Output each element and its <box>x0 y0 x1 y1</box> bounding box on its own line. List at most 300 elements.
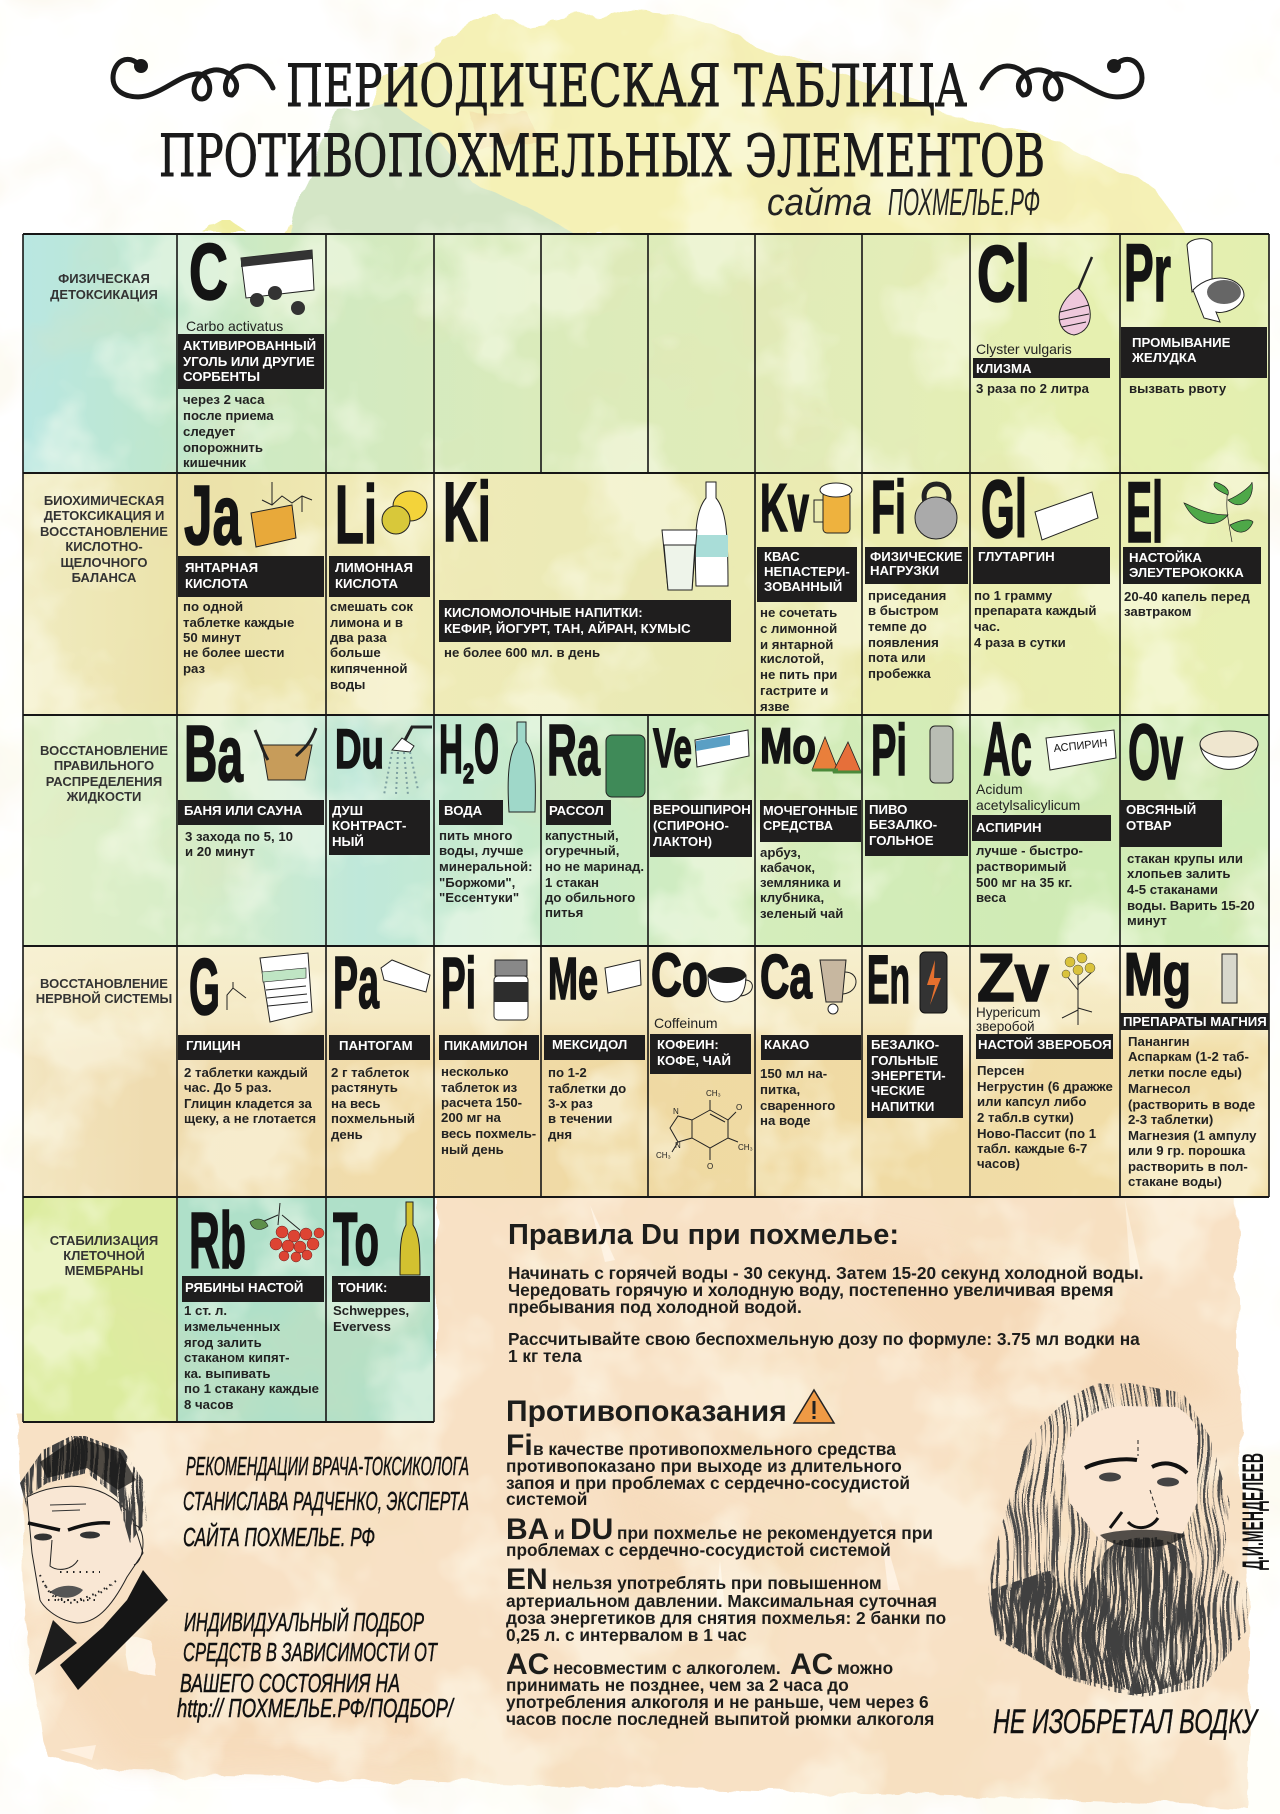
symbol Du: Du <box>335 717 384 780</box>
dosage: с лимонной <box>760 621 837 636</box>
name: КИСЛОТА <box>335 576 398 591</box>
cell: To tonic <box>332 1197 430 1334</box>
icon: box <box>605 960 641 993</box>
dosage: растворимый <box>976 859 1066 874</box>
icon: mug <box>814 483 852 533</box>
dosage: Ново-Пассит (по 1 <box>977 1126 1096 1141</box>
symbol Ja: Ja <box>184 468 242 562</box>
dosage: приседания <box>868 588 946 603</box>
name: ЗОВАННЫЙ <box>764 579 842 594</box>
dosage: Персен <box>977 1063 1025 1078</box>
icon: cocoa glass <box>820 960 856 1014</box>
cell: Gl glutargin <box>973 464 1110 650</box>
name bar <box>1121 327 1267 378</box>
dosage: на весь <box>331 1096 380 1111</box>
icon: kettlebell <box>915 484 957 539</box>
dosage: кислотой, <box>760 651 824 666</box>
text block: Fi warning: в качестве противопохмельного средства <box>533 1439 896 1459</box>
molecule: caffeine <box>656 1089 753 1171</box>
name bar <box>865 800 968 856</box>
text block: individual selection: http:// ПОХМЕЛЬЕ.РФ/ПОДБОР/ <box>177 1693 455 1723</box>
cell: H2O water <box>439 710 535 905</box>
dosage: 20-40 капель перед <box>1124 589 1250 604</box>
dosage: пота или <box>868 650 926 665</box>
icon: jar <box>494 960 528 1020</box>
name: ГОЛЬНЫЕ <box>871 1053 938 1068</box>
molecule: caffeine: O <box>707 1162 713 1171</box>
row label: nervous system: ВОССТАНОВЛЕНИЕ <box>40 976 168 991</box>
dosage: гастрите и <box>760 683 828 698</box>
dosage: Глицин кладется за <box>184 1096 313 1111</box>
dosage: минеральной: <box>439 859 533 874</box>
name: КЕФИР, ЙОГУРТ, ТАН, АЙРАН, КУМЫС <box>444 621 691 636</box>
text block: rules: Начинать с горячей воды - 30 секунд. Затем 15-20 секунд холодной воды. <box>508 1263 1144 1283</box>
icon: box <box>381 960 430 992</box>
icon: tonic bottle <box>400 1202 420 1275</box>
name: ЛИМОННАЯ <box>335 560 413 575</box>
text block: En warning: нельзя употреблять при повышенном <box>552 1573 882 1593</box>
dosage: язве <box>760 699 790 714</box>
icon: box <box>1035 492 1098 540</box>
dosage: Панангин <box>1128 1034 1190 1049</box>
cell: En energy drinks <box>867 941 963 1118</box>
dosage: не более шести <box>183 645 284 660</box>
name: ГОЛЬНОЕ <box>869 833 934 848</box>
text block: Fi warning: запоя и при проблемах с сердечно-сосудистой <box>506 1473 910 1493</box>
dosage: 3 захода по 5, 10 <box>185 829 293 844</box>
name: ТОНИК: <box>338 1280 387 1295</box>
name: НАПИТКИ <box>871 1099 934 1114</box>
name bar <box>976 1034 1113 1059</box>
molecule: caffeine: N <box>675 1141 681 1150</box>
symbol Ba: Ba <box>184 709 243 798</box>
symbol H2O: 2 <box>463 758 474 789</box>
dosage: (растворить в воде <box>1128 1097 1255 1112</box>
cell: Ov oat broth <box>1120 707 1258 928</box>
text block: Ba and Du warning: и <box>554 1523 565 1543</box>
text block: rules: Чередовать горячую и холодную воду, постепенно увеличивая время <box>508 1280 1114 1300</box>
name bar <box>1120 800 1222 847</box>
row label: fluid redistribution: ПРАВИЛЬНОГО <box>54 758 154 773</box>
cell: Me mexidol <box>544 946 645 1142</box>
text block: En warning: доза энергетиков для снятия похмелья: 2 банки по <box>506 1608 946 1628</box>
name bar <box>178 334 324 389</box>
icon: plant <box>1184 482 1253 542</box>
symbol Pi: Pi <box>871 711 907 791</box>
text block: Ba and Du warning: DU <box>570 1513 613 1546</box>
name bar <box>761 1035 861 1060</box>
icon: aspirin box <box>1046 730 1116 770</box>
dosage: смешать сок <box>330 599 413 614</box>
name: КИСЛОТА <box>185 576 248 591</box>
dosage: огуречный, <box>545 843 619 858</box>
name: ОТВАР <box>1126 818 1172 833</box>
name: ПРЕПАРАТЫ МАГНИЯ <box>1123 1014 1267 1029</box>
name: АКТИВИРОВАННЫЙ <box>183 338 316 353</box>
symbol Pi: Pi <box>441 944 476 1024</box>
name: ЧЕСКИЕ <box>871 1083 925 1098</box>
text block: doctor recommendation: САЙТА ПОХМЕЛЬЕ. РФ <box>183 1522 375 1552</box>
symbol Ac: Ac <box>983 707 1032 792</box>
cell: Ra brine <box>545 711 645 920</box>
heading: Du rules: Правила Du при похмелье: <box>508 1219 899 1251</box>
cell: H2O water: O <box>474 710 499 788</box>
symbol Mo: Mo <box>760 718 816 774</box>
dosage: таблеток из <box>441 1080 518 1095</box>
dosage: кабачок, <box>760 860 815 875</box>
name: ВОДА <box>444 803 483 818</box>
dosage: таблетке каждые <box>183 615 294 630</box>
dosage: 2 табл.в сутки) <box>977 1110 1074 1125</box>
name bar <box>329 1035 430 1060</box>
dosage: не более 600 мл. в день <box>444 645 600 660</box>
text block: En warning: EN <box>506 1563 548 1596</box>
dosage: 2 г таблеток <box>331 1065 409 1080</box>
text block: Ac warning: часов после последней выпитой рюмки алкоголя <box>506 1709 934 1729</box>
dosage: ный день <box>441 1142 504 1157</box>
dosage: расчета 150- <box>441 1095 522 1110</box>
title <box>159 52 1045 190</box>
dosage: 3 раза по 2 литра <box>976 381 1090 396</box>
cell: Fi exercise <box>865 465 968 681</box>
dosage: клубника, <box>760 890 824 905</box>
text block: Ac warning: употребления алкоголя и не раньше, чем через 6 <box>506 1692 929 1712</box>
row label: fluid redistribution: ЖИДКОСТИ <box>66 789 141 804</box>
cell: Du shower <box>329 717 432 855</box>
icon: bowl <box>1200 731 1258 769</box>
symbol To: To <box>333 1197 379 1281</box>
dosage: щеку, а не глотается <box>184 1111 316 1126</box>
text block: individual selection <box>177 1607 455 1723</box>
dosage: Негрустин (6 дражже <box>977 1079 1113 1094</box>
dosage: табл. каждые 6-7 <box>977 1141 1087 1156</box>
icon: wooden bucket <box>255 728 316 780</box>
text block: Ba and Du warning: при похмелье не рекомендуется при <box>617 1523 933 1543</box>
dosage: лимона и в <box>330 615 403 630</box>
symbol Cl: Cl <box>977 229 1030 318</box>
dosage: сваренного <box>760 1098 835 1113</box>
symbol Ki: Ki <box>443 465 491 559</box>
dosage: два раза <box>330 630 387 645</box>
name: МОЧЕГОННЫЕ <box>763 803 858 818</box>
name: КОФЕИН: <box>657 1037 719 1052</box>
name: НАГРУЗКИ <box>870 563 939 578</box>
symbol Ca: Ca <box>760 943 812 1012</box>
cell: Rb rowan <box>182 1196 324 1412</box>
subtitle <box>767 182 1040 224</box>
symbol C: C <box>189 227 228 316</box>
subtitle: сайта <box>767 182 872 224</box>
dosage: но не маринад. <box>545 859 644 874</box>
icon: glycine package <box>227 953 312 1022</box>
dosage: питка, <box>760 1082 800 1097</box>
dosage: вызвать рвоту <box>1129 381 1227 396</box>
latin name: Carbo activatus <box>186 318 283 334</box>
dosage: 1 стакан <box>545 875 599 890</box>
dosage: препарата каждый <box>974 603 1097 618</box>
icon: bottle and glass <box>662 482 728 590</box>
dosage: "Ессентуки" <box>439 890 519 905</box>
dosage: таблетки до <box>548 1081 626 1096</box>
dosage: пробежка <box>868 666 931 681</box>
cell: Mg magnesium <box>1120 941 1269 1189</box>
name bar <box>760 800 861 842</box>
cell: G glycine: G <box>189 942 220 1031</box>
dosage: или капсул либо <box>977 1094 1086 1109</box>
symbol Ve: Ve <box>653 716 692 779</box>
symbol Rb: Rb <box>189 1196 246 1285</box>
name: (СПИРОНО- <box>653 818 729 833</box>
dosage: лучше - быстро- <box>976 843 1083 858</box>
dosage: до обильного <box>545 890 635 905</box>
text block: Ba and Du warning: проблемах с сердечно-сосудистой системой <box>506 1540 891 1560</box>
dosage: "Боржоми", <box>439 875 515 890</box>
row label: biochemical detox: ДЕТОКСИКАЦИЯ И <box>44 508 164 523</box>
molecule: caffeine: O <box>736 1103 742 1112</box>
dosage: измельченных <box>184 1319 281 1334</box>
name: НАСТОЙ ЗВЕРОБОЯ <box>978 1037 1112 1052</box>
dosage: 2 таблетки каждый <box>184 1065 308 1080</box>
row label: cell membrane: СТАБИЛИЗАЦИЯ <box>50 1233 158 1248</box>
text block: doctor recommendation: СТАНИСЛАВА РАДЧЕНКО, ЭКСПЕРТА <box>183 1486 469 1516</box>
icon: watermelon <box>812 737 861 772</box>
cell: Mo diuretics <box>760 718 861 921</box>
dosage: не сочетать <box>760 605 837 620</box>
dosage: Schweppes, <box>333 1303 409 1318</box>
icon: pill box <box>241 250 314 315</box>
name: НЫЙ <box>332 834 364 849</box>
name: БЕЗАЛКО- <box>869 817 937 832</box>
row label: fluid redistribution: ВОССТАНОВЛЕНИЕ <box>40 743 168 758</box>
title: ПЕРИОДИЧЕСКАЯ ТАБЛИЦА <box>286 52 967 120</box>
cell: Ve veroshpiron <box>650 716 752 857</box>
name bar <box>439 600 731 642</box>
symbol Pr: Pr <box>1124 228 1171 319</box>
icon: rowan berries <box>250 1203 324 1262</box>
cell: Zv St John's wort <box>976 940 1113 1171</box>
icon: coffee cup <box>708 967 752 1002</box>
dosage: часов) <box>977 1156 1020 1171</box>
symbol Fi: Fi <box>871 465 906 549</box>
dosage: кипяченной <box>330 661 407 676</box>
cell: Pi beer <box>865 711 968 856</box>
text block: Fi warning: системой <box>506 1489 587 1509</box>
dosage: 200 мг на <box>441 1110 502 1125</box>
text block: Ac warning: можно <box>837 1658 893 1678</box>
dosage: не пить при <box>760 667 837 682</box>
dosage: через 2 часа <box>183 392 265 407</box>
row label: cell membrane: КЛЕТОЧНОЙ <box>63 1248 145 1263</box>
name: НЕПАСТЕРИ- <box>764 564 850 579</box>
dosage: 4 раза в сутки <box>974 635 1066 650</box>
dosage: следует <box>183 424 236 439</box>
dosage: пить много <box>439 828 512 843</box>
name bar <box>757 547 857 602</box>
row label: physical detox: ФИЗИЧЕСКАЯ <box>58 271 150 286</box>
cell: El eleuterococcus <box>1123 465 1261 619</box>
dosage: арбуз, <box>760 845 801 860</box>
name bar <box>439 800 503 825</box>
row label: biochemical detox: КИСЛОТНО- <box>65 539 143 554</box>
name bar <box>178 800 324 825</box>
name: ПАНТОГАМ <box>339 1038 413 1053</box>
row label: nervous system: НЕРВНОЙ СИСТЕМЫ <box>36 991 172 1006</box>
row label: cell membrane: МЕМБРАНЫ <box>65 1263 143 1278</box>
dosage: стаканом кипят- <box>184 1350 290 1365</box>
cell: Li citric acid <box>329 468 430 692</box>
name bar <box>439 1035 539 1060</box>
name bar <box>1120 1013 1269 1030</box>
dosage: и 20 минут <box>185 844 255 859</box>
dosage: Магнесол <box>1128 1081 1191 1096</box>
text block: Ac warning: AC <box>506 1648 549 1681</box>
dosage: темпе до <box>868 619 927 634</box>
text block: Ac warning: принимать не позднее, чем за 2 часа до <box>506 1675 849 1695</box>
dosage: по 1 стакану каждые <box>184 1381 319 1396</box>
name bar <box>329 556 430 597</box>
portrait: Mendeleev <box>988 1380 1250 1698</box>
text block: rules: пребывания под холодной водой. <box>508 1297 802 1317</box>
name: ПИВО <box>869 802 907 817</box>
dosage: 150 мл на- <box>760 1066 827 1081</box>
cell: Ac aspirin <box>972 707 1116 905</box>
name: ВЕРОШПИРОН <box>653 802 751 817</box>
molecule: caffeine: N <box>673 1107 679 1116</box>
latin name: Acidum <box>976 781 1023 797</box>
dosage: летки после еды) <box>1128 1065 1242 1080</box>
name: РАССОЛ <box>549 803 604 818</box>
name: ЭЛЕУТЕРОКОККА <box>1129 565 1244 580</box>
molecule: caffeine: CH₃ <box>738 1143 753 1152</box>
name: ЛАКТОН) <box>653 834 712 849</box>
dosage: растворить в пол- <box>1128 1159 1248 1174</box>
dosage: 3-х раз <box>548 1096 593 1111</box>
dosage: 2-3 таблетки) <box>1128 1112 1213 1127</box>
cell: Kv kvass <box>757 470 857 714</box>
dosage: земляника и <box>760 875 841 890</box>
name bar <box>1123 547 1261 584</box>
name bar <box>650 800 752 857</box>
name bar <box>973 358 1110 378</box>
name: КОФЕ, ЧАЙ <box>657 1053 731 1068</box>
symbol Ov: Ov <box>1128 707 1183 796</box>
text block: doctor recommendation: РЕКОМЕНДАЦИИ ВРАЧА-ТОКСИКОЛОГА <box>186 1451 469 1481</box>
symbol Co: Co <box>651 941 708 1009</box>
text block: Ac warning: несовместим с алкоголем. <box>553 1658 781 1678</box>
name bar <box>178 556 324 597</box>
symbol Li: Li <box>335 468 377 561</box>
dosage: хлопьев залить <box>1127 866 1231 881</box>
symbol Zv: Zv <box>977 940 1049 1016</box>
cell: G glycine <box>178 942 324 1126</box>
text block: doctor recommendation <box>183 1451 469 1552</box>
row label: biochemical detox: БАЛАНСА <box>72 570 137 585</box>
name: НАСТОЙКА <box>1129 550 1202 565</box>
name: КАКАО <box>764 1037 809 1052</box>
cell: Cl enema <box>973 229 1110 396</box>
name: ПИКАМИЛОН <box>444 1038 527 1053</box>
name: БЕЗАЛКО- <box>871 1037 939 1052</box>
name bar <box>973 547 1110 584</box>
name: ГЛУТАРГИН <box>978 549 1055 564</box>
dosage: похмельный <box>331 1111 415 1126</box>
dosage: Evervess <box>333 1319 391 1334</box>
icon: herb <box>1062 953 1095 1025</box>
dosage: веса <box>976 890 1007 905</box>
name: ФИЗИЧЕСКИЕ <box>870 549 963 564</box>
cell: Pa pantogam <box>329 941 430 1142</box>
dosage: 500 мг на 35 кг. <box>976 875 1072 890</box>
dosage: зеленый чай <box>760 906 843 921</box>
dosage: 4-5 стаканами <box>1127 882 1218 897</box>
dosage: на воде <box>760 1113 810 1128</box>
name: ДУШ <box>332 803 363 818</box>
name: ЖЕЛУДКА <box>1131 350 1197 365</box>
symbol Kv: Kv <box>760 470 809 546</box>
dosage: стакане воды) <box>1128 1174 1222 1189</box>
cell: Pr gastric lavage <box>1121 228 1267 396</box>
dosage: по 1 грамму <box>974 588 1053 603</box>
subtitle: ПОХМЕЛЬЕ.РФ <box>888 182 1040 224</box>
portrait: toxicologist <box>20 1433 168 1690</box>
dosage: в быстром <box>868 603 939 618</box>
text block: Fi warning: противопоказано при выходе из длительного <box>506 1456 902 1476</box>
dosage: 1 ст. л. <box>184 1303 227 1318</box>
name: ОВСЯНЫЙ <box>1126 802 1196 817</box>
dosage: 8 часов <box>184 1397 234 1412</box>
dosage: час. До 5 раз. <box>184 1080 272 1095</box>
text block: Ba and Du warning: BA <box>506 1513 549 1546</box>
text block: rules: 1 кг тела <box>508 1346 582 1366</box>
dosage: по 1-2 <box>548 1065 587 1080</box>
cell: Ca cocoa <box>760 943 861 1128</box>
icon: aspirin box: АСПИРИН <box>1053 737 1108 755</box>
name bar <box>178 1035 324 1060</box>
dosage: воды <box>330 677 365 692</box>
dosage: в течении <box>548 1111 612 1126</box>
text block: individual selection: ВАШЕГО СОСТОЯНИЯ НА <box>180 1668 400 1698</box>
name: КИСЛОМОЛОЧНЫЕ НАПИТКИ: <box>444 605 643 620</box>
icon: box and molecule <box>251 482 312 547</box>
row label: biochemical detox: ЩЕЛОЧНОГО <box>60 555 148 570</box>
name: КОНТРАСТ- <box>332 818 406 833</box>
name bar <box>329 800 430 855</box>
name bar <box>332 1276 430 1302</box>
name: МЕКСИДОЛ <box>552 1037 627 1052</box>
name bar <box>972 815 1111 841</box>
cell: Ki fermented milk <box>439 465 731 660</box>
heading: contraindications: Противопоказания <box>506 1395 787 1428</box>
cell: Ba sauna <box>178 709 324 859</box>
symbol Me: Me <box>548 946 598 1012</box>
name bar <box>867 1035 963 1118</box>
icon: warning triangle <box>794 1390 834 1423</box>
symbol Gl: Gl <box>981 464 1027 555</box>
name: ПРОМЫВАНИЕ <box>1132 335 1231 350</box>
dosage: минут <box>1127 913 1167 928</box>
dosage: и янтарной <box>760 637 833 652</box>
dosage: появления <box>868 635 939 650</box>
text block: individual selection: ИНДИВИДУАЛЬНЫЙ ПОДБОР <box>184 1607 424 1637</box>
text block: individual selection: СРЕДСТВ В ЗАВИСИМОСТИ ОТ <box>183 1637 438 1667</box>
molecule: caffeine: CH₃ <box>656 1151 671 1160</box>
icon: shower <box>384 727 432 795</box>
table grid <box>23 234 1269 1422</box>
name: КЛИЗМА <box>976 361 1032 376</box>
dosage: Аспаркам (1-2 таб- <box>1128 1049 1249 1064</box>
dosage: 50 минут <box>183 630 242 645</box>
name: УГОЛЬ ИЛИ ДРУГИЕ <box>183 354 315 369</box>
